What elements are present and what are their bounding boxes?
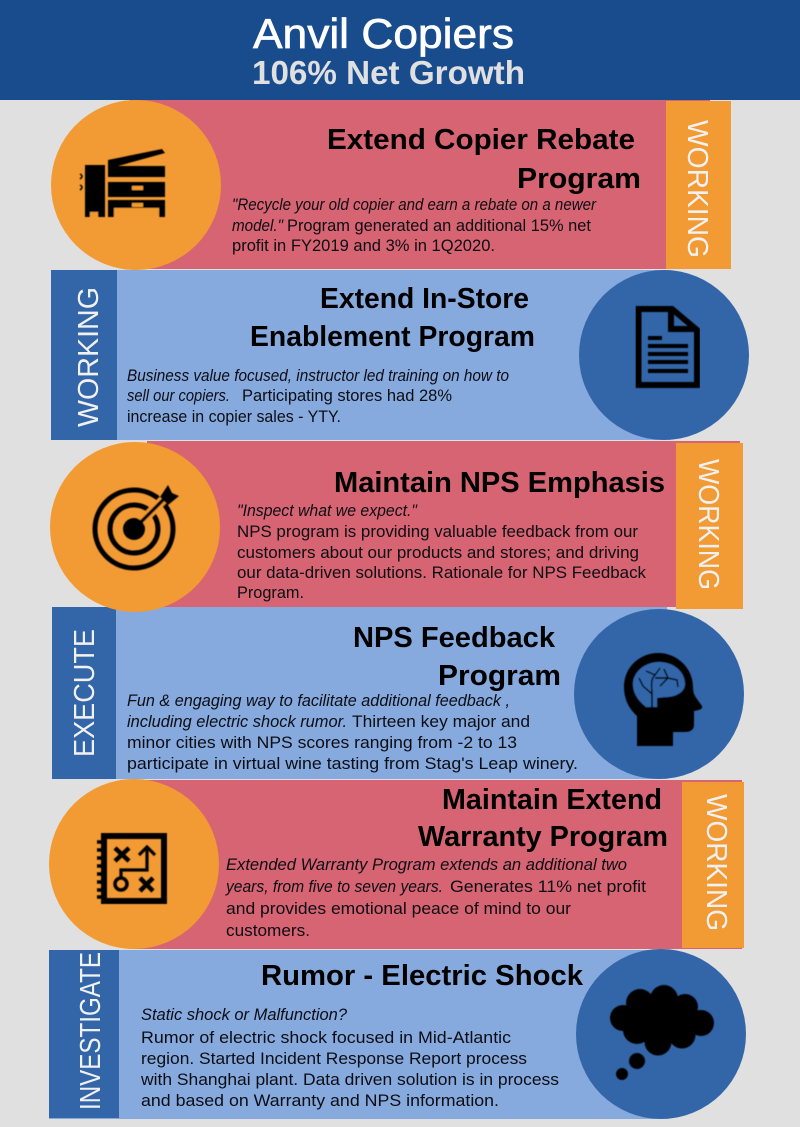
icon circle: document	[579, 270, 749, 440]
heading: Warranty Program	[418, 821, 668, 853]
header banner	[0, 0, 800, 100]
body text: Business value focused, instructor led training on how to	[127, 367, 509, 385]
body text: "Recycle your old copier and earn a rebate on a newer	[232, 196, 597, 214]
body text: customers.	[226, 922, 310, 940]
body text: profit in FY2019 and 3% in 1Q2020.	[232, 237, 495, 255]
panel: extend copier rebate program	[51, 100, 731, 270]
heading: Extend In-Store	[320, 283, 529, 315]
body text: including electric shock rumor.	[127, 713, 347, 731]
status tab: execute: EXECUTE	[69, 629, 101, 757]
body text: Program.	[237, 584, 304, 602]
body text: Participating stores had 28%	[242, 387, 452, 405]
body text: participate in virtual wine tasting from Stag's Leap winery.	[127, 755, 578, 773]
body text	[127, 367, 509, 426]
heading: Program	[438, 660, 561, 692]
body text: years, from five to seven years.	[225, 878, 443, 896]
heading: Maintain NPS Emphasis	[334, 467, 665, 499]
body text: minor cities with NPS scores ranging from -2 to 13	[127, 734, 517, 752]
panel: maintain nps emphasis	[50, 441, 743, 612]
heading: Rumor - Electric Shock	[261, 960, 583, 992]
title: Anvil Copiers	[253, 10, 514, 57]
icon circle: strategy plan	[49, 779, 219, 949]
panel: nps feedback program	[52, 607, 744, 779]
body text: Rumor of electric shock focused in Mid-Atlantic	[141, 1029, 511, 1047]
heading	[418, 784, 668, 853]
icon circle: target	[50, 442, 220, 612]
status tab: working: WORKING	[700, 794, 732, 931]
status tab: investigate	[49, 950, 119, 1118]
panel: rumor electric shock	[49, 949, 746, 1119]
body text: with Shanghai plant. Data driven solution is in process	[140, 1071, 559, 1089]
icon circle: head with brain	[574, 609, 744, 779]
status tab: working	[51, 270, 117, 440]
body text	[127, 692, 578, 773]
icon circle: copier	[51, 100, 221, 270]
heading	[353, 622, 561, 692]
body text: model."	[232, 217, 284, 235]
body text: Static shock or Malfunction?	[141, 1006, 348, 1024]
body text: Generates 11% net profit	[450, 878, 646, 896]
body text: NPS program is providing valuable feedback from our	[237, 523, 639, 541]
body text: Fun & engaging way to facilitate additional feedback ,	[127, 692, 510, 710]
body text: Extended Warranty Program extends an additional two	[226, 856, 627, 874]
body text	[225, 856, 646, 940]
panel: extend in-store enablement program	[51, 270, 749, 440]
status tab: working	[682, 782, 744, 948]
heading: Program	[517, 163, 641, 195]
body text: increase in copier sales - YTY.	[127, 408, 341, 426]
status tab: working	[676, 443, 743, 609]
heading: NPS Feedback	[353, 622, 555, 654]
body text: customers about our products and stores; and driving	[237, 544, 639, 562]
heading	[327, 124, 641, 195]
heading: Extend Copier Rebate	[327, 124, 635, 156]
status tab: working: WORKING	[692, 459, 724, 590]
icon circle: thought cloud	[576, 949, 746, 1119]
body text: and provides emotional peace of mind to our	[226, 900, 572, 918]
status tab: working: WORKING	[681, 120, 713, 258]
subtitle: 106% Net Growth	[252, 54, 525, 91]
body text: sell our copiers.	[127, 387, 230, 405]
status tab: investigate: INVESTIGATE	[75, 952, 107, 1110]
heading: Maintain Extend	[442, 784, 662, 816]
body text	[140, 1006, 559, 1110]
body text: and based on Warranty and NPS information.	[141, 1092, 499, 1110]
body text: our data-driven solutions. Rationale for NPS Feedback	[237, 564, 647, 582]
body text: "Inspect what we expect."	[237, 502, 418, 520]
body text: region. Started Incident Response Report process	[141, 1050, 527, 1068]
heading	[250, 283, 535, 353]
body text	[232, 196, 597, 255]
panel: maintain extend warranty program	[49, 779, 744, 949]
status tab: execute	[52, 607, 116, 779]
body text	[237, 502, 647, 602]
body text: Program generated an additional 15% net	[287, 217, 591, 235]
body text: Thirteen key major and	[352, 713, 530, 731]
status tab: working: WORKING	[73, 287, 105, 427]
heading: Enablement Program	[250, 321, 535, 353]
status tab: working	[666, 101, 731, 269]
